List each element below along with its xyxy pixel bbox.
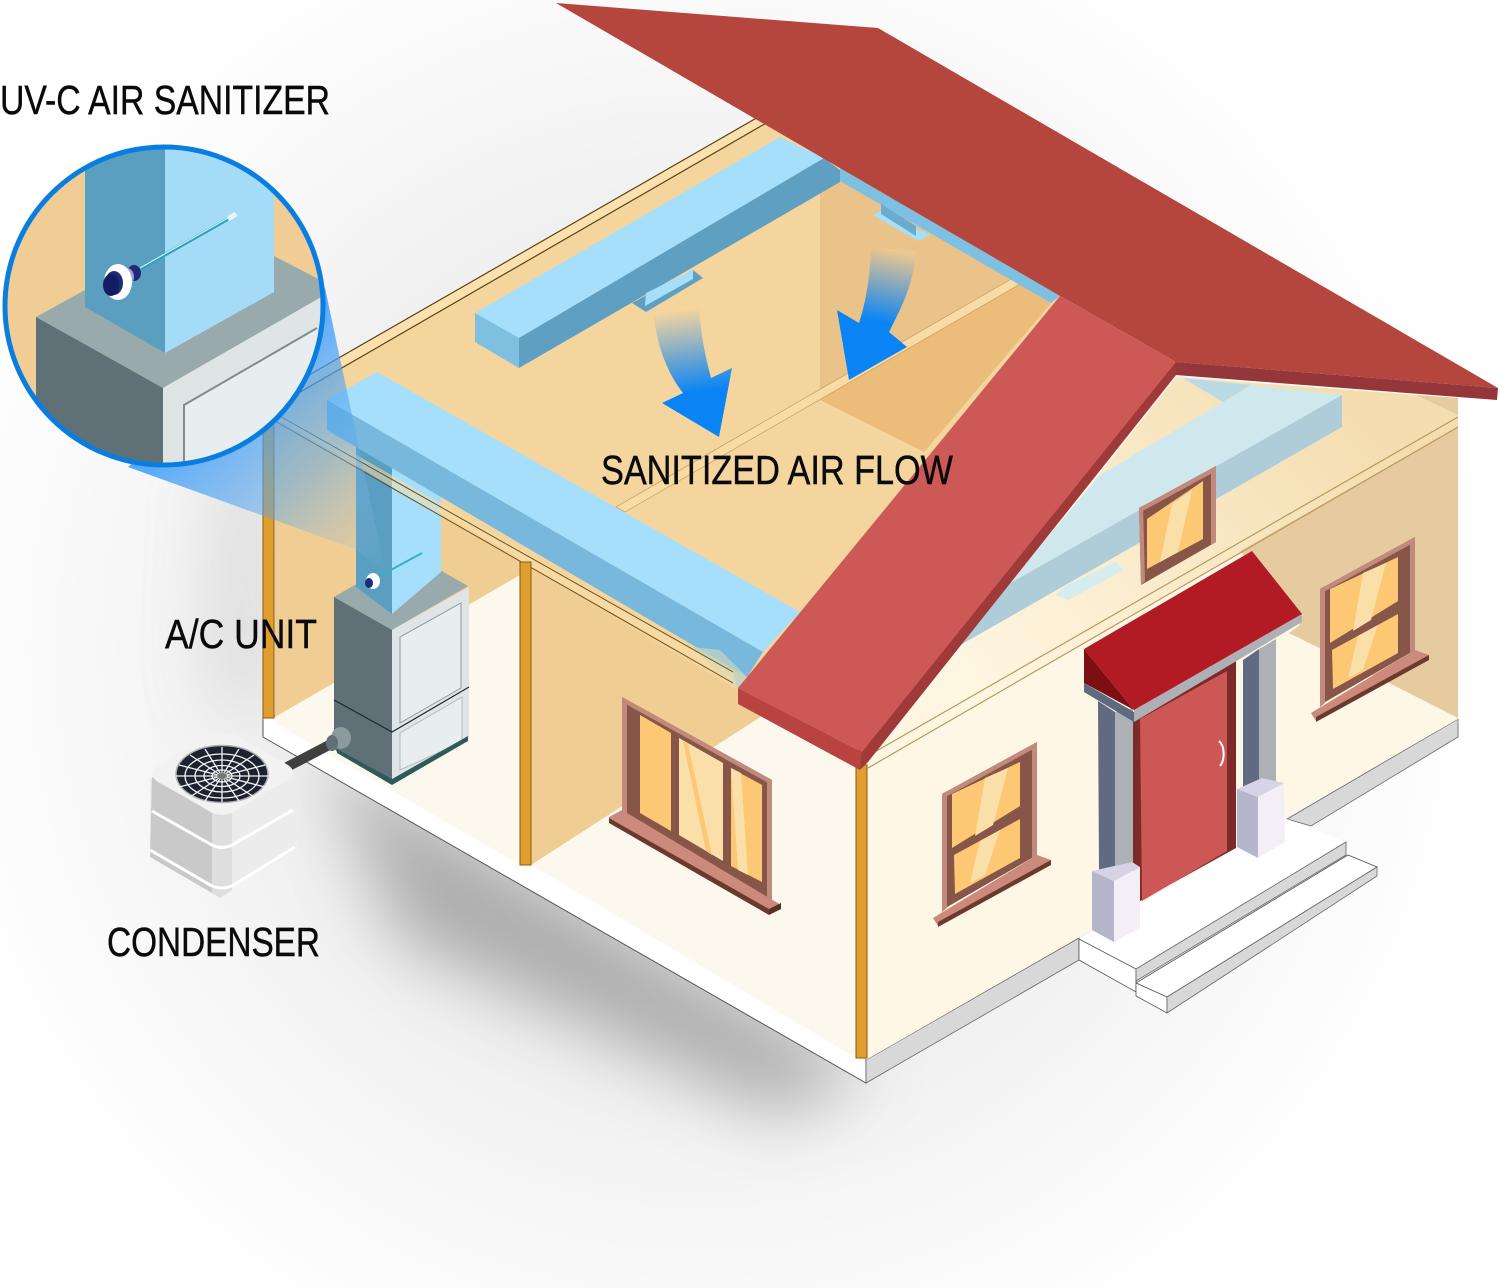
air flow arrow left — [654, 305, 732, 437]
condenser — [150, 733, 295, 898]
middle room — [531, 568, 866, 1058]
A/C unit — [334, 553, 469, 785]
corner post front — [856, 765, 867, 1058]
vent right — [873, 204, 930, 241]
porch column left — [1092, 701, 1140, 942]
porch column right — [1237, 639, 1285, 858]
left room — [275, 418, 520, 865]
UV lamp close-up — [103, 214, 236, 300]
interior shaded wall — [616, 168, 1060, 512]
air flow arrow right — [837, 248, 916, 380]
gable roof — [738, 296, 1176, 770]
label: UV-C air sanitizer: UV-C AIR SANITIZER — [0, 77, 330, 123]
window front-left wall — [609, 697, 781, 915]
corner post left — [263, 412, 274, 718]
attic duct, right — [957, 378, 1342, 647]
label: condenser: CONDENSER — [107, 919, 320, 965]
main duct — [327, 372, 800, 690]
refrigerant pipe — [287, 727, 351, 767]
vertical duct — [356, 440, 441, 614]
condenser fan — [176, 746, 268, 802]
window right wall left — [933, 742, 1051, 927]
duct base over unit — [356, 530, 441, 614]
duct upper — [475, 137, 840, 368]
front door — [1133, 660, 1236, 905]
AC unit close-up — [36, 256, 320, 462]
label: sanitized air flow: SANITIZED AIR FLOW — [601, 447, 953, 493]
floor slab — [263, 716, 1458, 1083]
window right wall right — [1311, 537, 1429, 722]
wall beam lines — [269, 410, 738, 690]
label: A/C unit: A/C UNIT — [165, 611, 317, 657]
duct close-up — [85, 130, 274, 353]
magnifier cone — [128, 288, 385, 570]
corner post middle — [520, 562, 531, 865]
ceiling — [269, 118, 1062, 692]
small UV lamp — [365, 553, 422, 589]
vent left — [632, 270, 703, 312]
magnifier circle — [5, 130, 330, 480]
main roof — [556, 3, 1498, 400]
steps — [1079, 819, 1377, 1013]
porch awning — [1084, 551, 1302, 722]
window attic — [1139, 466, 1216, 585]
house — [150, 3, 1498, 1083]
right wall — [866, 377, 1458, 1060]
roof beam band — [269, 116, 768, 410]
